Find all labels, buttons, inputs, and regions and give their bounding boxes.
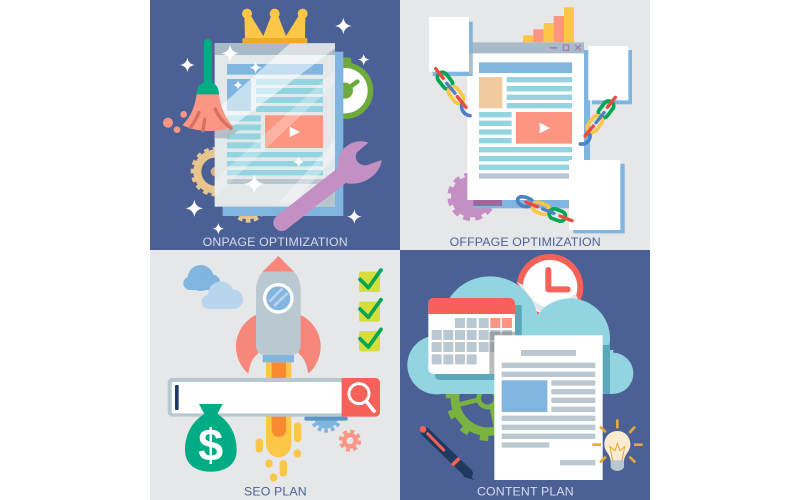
glass reflection <box>215 43 335 203</box>
play icon <box>290 127 300 137</box>
paper top right <box>588 46 632 104</box>
icon: rocket <box>236 256 321 378</box>
document text lines <box>502 350 595 465</box>
browser window <box>467 42 590 208</box>
image block <box>227 79 251 111</box>
icon: broom <box>163 39 238 138</box>
blue page backing <box>223 52 343 216</box>
icon: clock <box>517 254 583 321</box>
chain right <box>580 97 616 144</box>
chain top left <box>435 69 470 116</box>
icon: pen <box>420 426 474 480</box>
icon: purple gear <box>450 175 493 218</box>
label: offpage optimization: OFFPAGE OPTIMIZATION <box>450 235 601 249</box>
image block <box>479 77 502 108</box>
page header bar <box>227 64 323 75</box>
text lines left <box>479 112 512 143</box>
checklist <box>359 270 381 351</box>
icon: magnifier <box>349 384 374 411</box>
panel: offpage optimization <box>400 0 650 250</box>
text lines right <box>256 79 323 112</box>
calendar cells <box>432 318 512 364</box>
icon: crown <box>242 9 308 44</box>
sparkles <box>180 18 369 234</box>
chain bottom <box>518 197 572 223</box>
browser window <box>215 43 335 207</box>
icon: blue gear <box>304 403 348 431</box>
cloud <box>407 276 633 394</box>
calendar <box>428 298 522 380</box>
document image <box>502 380 547 412</box>
icon: light bulb <box>592 419 643 471</box>
icon: money bag: $ <box>198 420 223 471</box>
text lines wide <box>227 152 323 175</box>
paper bottom right <box>569 160 625 233</box>
icon: salmon gear <box>341 431 359 450</box>
icon: left gear <box>193 149 238 194</box>
panel: seo plan <box>150 250 400 500</box>
label: onpage optimization: ONPAGE OPTIMIZATION <box>203 235 348 249</box>
panel: onpage optimization <box>150 0 400 250</box>
text lines right <box>507 77 572 108</box>
icon: wrench <box>282 141 382 223</box>
icon: bottom gear <box>232 187 265 221</box>
play icon <box>540 123 550 133</box>
icon: dark cloud <box>183 265 220 291</box>
icon: stopwatch <box>317 57 373 119</box>
bar chart <box>523 7 574 44</box>
page header bar <box>479 62 572 73</box>
flame <box>256 416 301 482</box>
text lines left <box>227 115 261 148</box>
label: content plan: CONTENT PLAN <box>477 485 574 499</box>
icon: money bag <box>185 404 237 472</box>
paper top left <box>429 17 473 76</box>
video block <box>265 115 323 148</box>
label: seo plan: SEO PLAN <box>244 485 307 499</box>
video block <box>516 112 572 144</box>
icon: light cloud <box>202 281 243 309</box>
text lines wide <box>479 147 572 170</box>
panel: content plan <box>400 250 650 500</box>
icon: green gear <box>449 359 528 438</box>
document <box>494 335 603 480</box>
search bar <box>168 378 380 417</box>
